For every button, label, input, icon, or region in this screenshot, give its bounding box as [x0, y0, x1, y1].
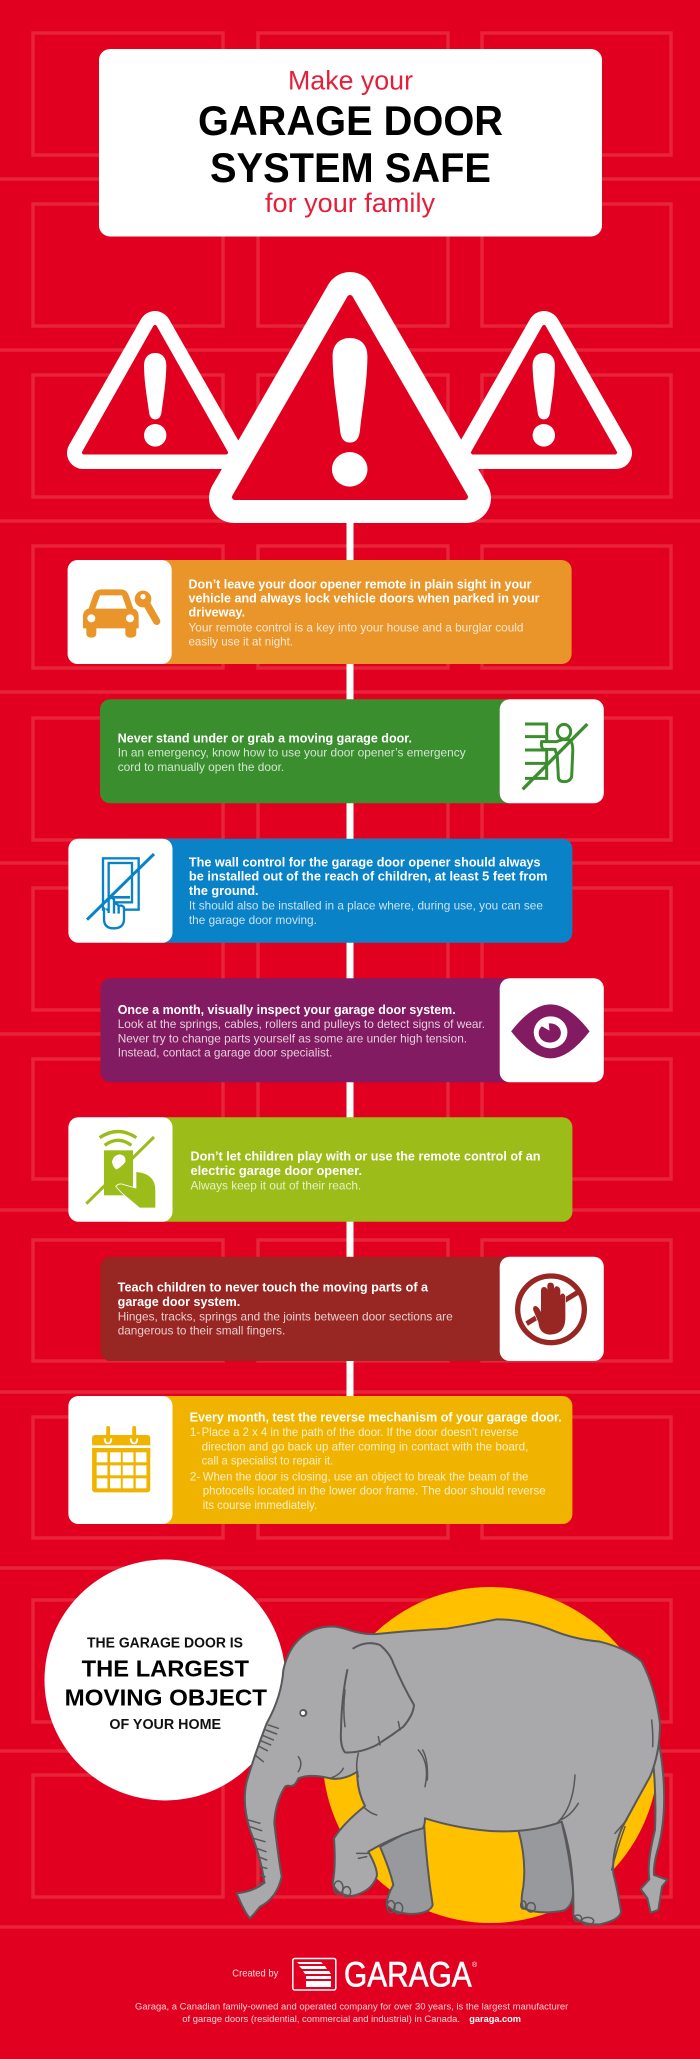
callout: largest moving object: MOVING OBJECT: [65, 1685, 267, 1711]
text: moving door advice: Never stand under or grab a moving garage door.: [118, 731, 412, 745]
text: reverse mechanism steps: 2-: [190, 1469, 200, 1483]
text: remote advice: Don’t leave your door opener remote in plain sight in your: [188, 577, 532, 591]
text: children and remote advice: [190, 1150, 540, 1192]
icon: stop hand in prohibition circle: [518, 1276, 584, 1343]
panel: wall control: [68, 839, 572, 943]
created by label: Created by: [232, 1968, 279, 1980]
text: reverse mechanism steps: [190, 1411, 562, 1512]
far legs: [380, 1822, 573, 1914]
logo wordmark: GARAGA: [344, 1956, 472, 1995]
text: wall control advice: The wall control for the garage door opener should always: [189, 856, 541, 870]
text: reverse mechanism steps: call a specialist to repair it.: [202, 1453, 333, 1467]
text: reverse mechanism steps: direction and go back up after coming in contact with the board,: [202, 1439, 528, 1453]
eye: [299, 1709, 307, 1717]
text: moving door advice: In an emergency, know how to use your door opener’s emergency: [118, 746, 466, 760]
text: inspection advice: Instead, contact a garage door specialist.: [118, 1046, 332, 1060]
callout: largest moving object: [44, 1560, 286, 1800]
text: moving parts advice: dangerous to their small fingers.: [118, 1324, 285, 1338]
text: reverse mechanism steps: Place a 2 x 4 in the path of the door. If the door doesn’t reverse: [202, 1425, 519, 1439]
text: remote advice: vehicle and always lock vehicle doors when parked in your: [188, 592, 540, 606]
callout: largest moving object: THE LARGEST: [82, 1656, 249, 1682]
ear: [341, 1643, 414, 1752]
text: inspection advice: Never try to change parts yourself as some are under high tension.: [118, 1031, 467, 1045]
website: garaga.com: [469, 2014, 521, 2025]
text: moving parts advice: [118, 1281, 453, 1338]
text: inspection advice: [118, 1003, 485, 1060]
text: inspection advice: Look at the springs, cables, rollers and pulleys to detect signs of wear.: [118, 1017, 485, 1031]
icon: eye: [511, 1004, 590, 1058]
text: remote advice: [188, 577, 540, 649]
text: moving door advice: cord to manually open the door.: [118, 760, 284, 774]
panel: moving parts: [100, 1257, 604, 1361]
text: remote advice: easily use it at night.: [188, 635, 293, 649]
text: children and remote advice: Always keep it out of their reach.: [190, 1178, 361, 1192]
panel: reverse mechanism test: [68, 1396, 572, 1524]
callout: largest moving object: OF YOUR HOME: [109, 1717, 221, 1733]
wrinkles and toes: [248, 1690, 653, 1925]
text: remote advice: driveway.: [188, 606, 245, 620]
illustration: elephant: [237, 1619, 667, 1925]
text: children and remote advice: Don’t let children play with or use the remote control of an: [190, 1150, 540, 1164]
panel: monthly inspection: [100, 978, 604, 1082]
text: children and remote advice: electric garage door opener.: [190, 1164, 362, 1178]
text: moving parts advice: Hinges, tracks, springs and the joints between door sections are: [118, 1309, 453, 1323]
company description: [135, 2001, 568, 2025]
icon: wall control with hand, crossed out: [87, 854, 154, 928]
panel: remote in plain sight: [68, 560, 572, 664]
registered mark: ®: [472, 1961, 478, 1969]
text: wall control advice: It should also be installed in a place where, during use, you can see: [189, 898, 543, 912]
title line: for your family: for your family: [265, 188, 435, 218]
icon: remote in hand, crossed out: [86, 1131, 155, 1208]
company description: Garaga, a Canadian family-owned and operated company for over 30 years, is the largest manufacturer: [135, 2001, 568, 2012]
text: moving door advice: [118, 731, 466, 774]
panel: children and remote: [68, 1117, 572, 1222]
text: moving parts advice: garage door system.: [118, 1295, 240, 1309]
icon: Garaga door logo: [293, 1958, 336, 1990]
icon: left warning triangle: [83, 327, 227, 453]
text: reverse mechanism steps: Every month, test the reverse mechanism of your garage door.: [190, 1411, 562, 1425]
text: reverse mechanism steps: its course immediately.: [203, 1498, 317, 1512]
title line: SYSTEM SAFE: SYSTEM SAFE: [210, 144, 491, 191]
text: reverse mechanism steps: 1-: [190, 1425, 200, 1439]
icon: central warning triangle: [234, 297, 466, 498]
text: wall control advice: the ground.: [189, 884, 259, 898]
title line: Make your: Make your: [288, 66, 413, 96]
text: wall control advice: be installed out of the reach of children, at least 5 feet from: [189, 870, 548, 884]
text: remote advice: Your remote control is a key into your house and a burglar could: [188, 621, 524, 635]
text: moving parts advice: Teach children to never touch the moving parts of a: [118, 1281, 429, 1295]
text: wall control advice: [189, 856, 548, 927]
icon: right warning triangle: [472, 327, 616, 453]
company description: of garage doors (residential, commercial and industrial) in Canada.: [182, 2014, 460, 2025]
body: [237, 1619, 660, 1924]
footer: [135, 1956, 568, 2025]
text: reverse mechanism steps: photocells located in the lower door frame. The door should reverse: [203, 1483, 546, 1497]
text: wall control advice: the garage door moving.: [189, 913, 317, 927]
text: reverse mechanism steps: When the door is closing, use an object to break the beam of the: [203, 1469, 529, 1483]
icon: person under door, crossed out: [523, 724, 587, 789]
yellow sun circle: [322, 1587, 658, 1923]
icon: car and key: [83, 589, 157, 638]
title card: [99, 49, 602, 236]
title line: GARAGE DOOR: GARAGE DOOR: [198, 97, 503, 144]
text: inspection advice: Once a month, visually inspect your garage door system.: [118, 1003, 456, 1017]
warning triangles: [83, 297, 616, 498]
timeline connector line: [346, 515, 354, 1400]
panel: moving door: [100, 699, 604, 803]
tail: [641, 1720, 667, 1913]
icon: calendar: [92, 1428, 150, 1492]
callout: largest moving object: THE GARAGE DOOR IS: [87, 1636, 243, 1652]
